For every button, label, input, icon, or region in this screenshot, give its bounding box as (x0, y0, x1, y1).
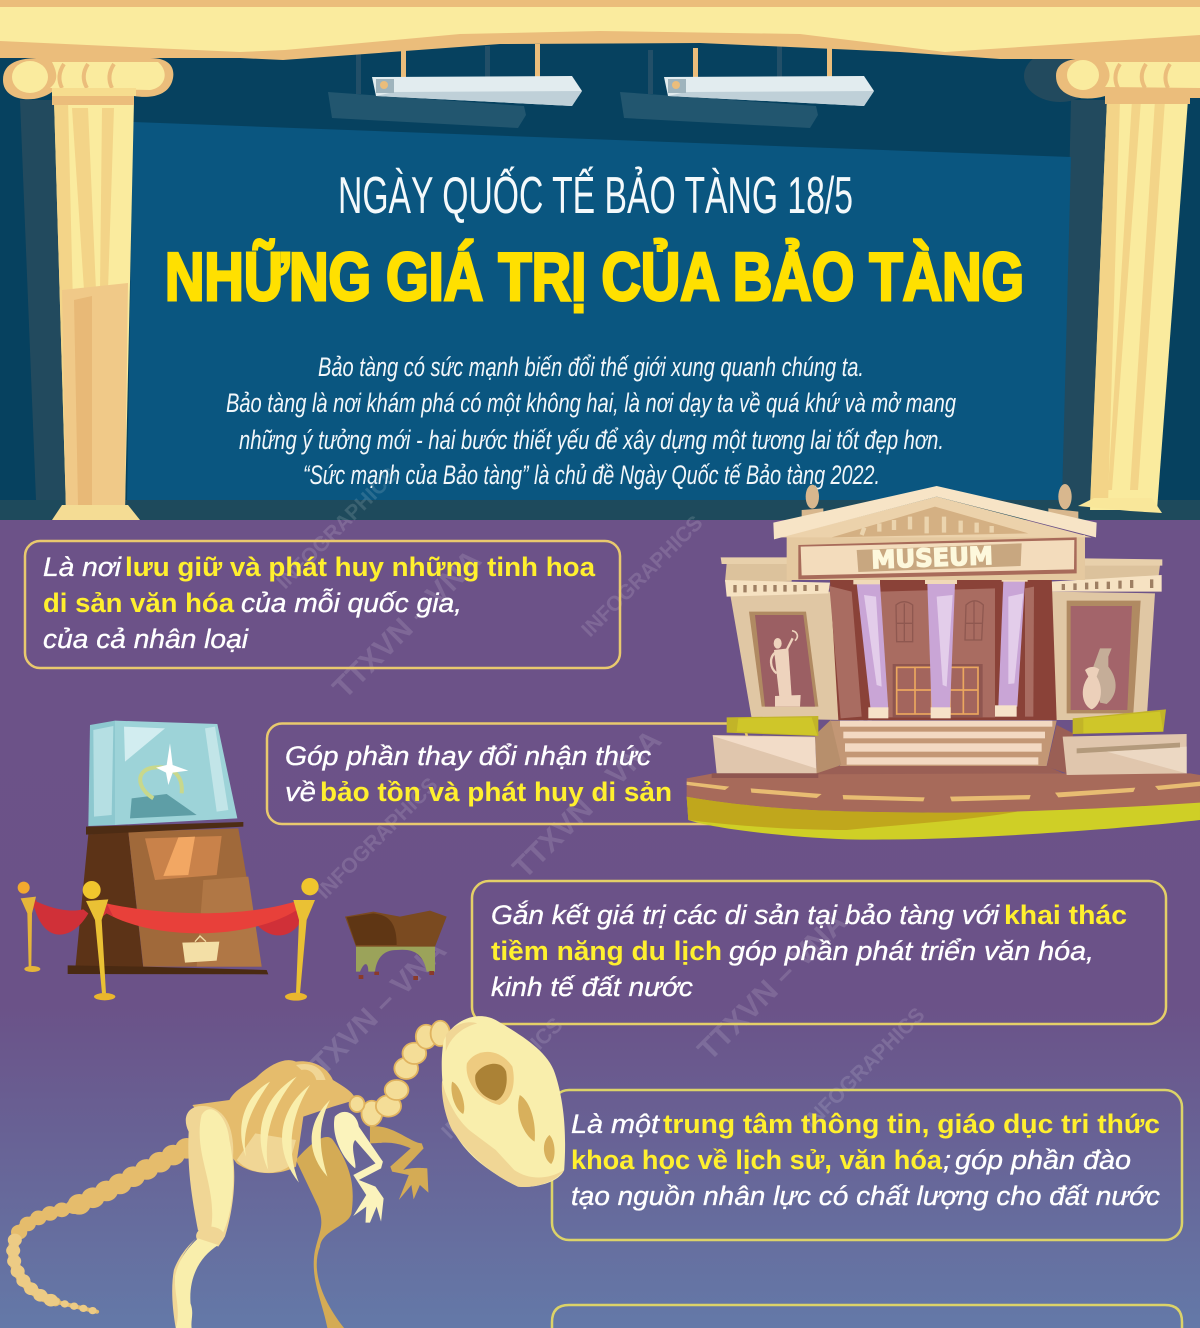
intro text block (226, 352, 956, 490)
watermarks: INFOGRAPHICS (577, 511, 707, 642)
rope posts and ropes (18, 878, 319, 1001)
callout 1: lưu giữ và phát huy những tinh hoa (125, 552, 596, 582)
callout 4: trung tâm thông tin, giáo dục tri thức (663, 1109, 1160, 1139)
callout 3: góp phần phát triển văn hóa, (729, 936, 1094, 966)
callout 5 (cropped at page bottom) (552, 1305, 1182, 1328)
watermarks: INFOGRAPHICS (272, 463, 402, 594)
callout 1 (25, 541, 620, 668)
museum sign (798, 537, 1077, 579)
far leg and arm (296, 1126, 428, 1328)
callout 1: di sản văn hóa (43, 588, 235, 618)
callout 1: của cả nhân loại (43, 624, 249, 654)
ceiling beam (0, 0, 1200, 60)
neck (350, 1021, 450, 1126)
panel: museum hall backdrop (0, 0, 1200, 520)
panel: purple content background (0, 520, 1200, 1328)
callout 4: ; (943, 1145, 951, 1175)
watermarks: INFOGRAPHICS (769, 688, 899, 819)
spine and ribcage (192, 1060, 355, 1183)
pedestal (68, 822, 268, 974)
left column (3, 58, 173, 520)
icon: museum bench (345, 911, 447, 980)
ceiling lamps (328, 44, 874, 128)
callout 4: khoa học về lịch sử, văn hóa (571, 1145, 943, 1175)
watermarks: INFOGRAPHICS (437, 1013, 567, 1144)
intro text block: những ý tưởng mới - hai bước thiết yếu để xây dựng một tương lai tốt đẹp hơn. (239, 425, 944, 455)
glass case (88, 721, 237, 826)
road and lawn (687, 766, 1200, 840)
callout 3: khai thác (1004, 900, 1127, 930)
statue and vases (771, 631, 1116, 709)
watermarks: INFOGRAPHICS (312, 773, 442, 904)
watermarks: TTXVN – VNA (327, 544, 488, 705)
title: event line: NGÀY QUỐC TẾ BẢO TÀNG 18/5 (338, 166, 853, 225)
watermarks: TTXVN – VNA (507, 724, 668, 885)
intro text block: Bảo tàng có sức mạnh biến đổi thế giới xung quanh chúng ta. (318, 352, 864, 382)
callout 3: Gắn kết giá trị các di sản tại bảo tàng với (491, 899, 1000, 930)
right column (1056, 58, 1200, 513)
tail (13, 1148, 187, 1312)
icon: display case with ropes (18, 721, 319, 1001)
portico (829, 577, 1057, 720)
wings (721, 557, 1162, 720)
intro text block: Bảo tàng là nơi khám phá có một không hai, là nơi dạy ta về quá khứ và mở mang (226, 388, 956, 418)
watermarks (272, 463, 929, 1144)
callout 2: bảo tồn và phát huy di sản (320, 777, 672, 807)
near arm (334, 1112, 384, 1223)
watermarks: TTXVN – VNA (692, 906, 853, 1067)
callout 1: Là nơi (43, 552, 122, 582)
icon: museum building (687, 484, 1200, 840)
callout 4: Là một (571, 1109, 661, 1139)
callout 4 (552, 1090, 1182, 1240)
callout 3: kinh tế đất nước (491, 972, 694, 1002)
callout 3 (472, 881, 1166, 1024)
callout 4: góp phần đào (955, 1145, 1131, 1175)
near leg (172, 1106, 234, 1328)
icon: dinosaur skeleton (13, 1016, 565, 1328)
lilac columns (853, 577, 1028, 718)
watermarks: INFOGRAPHICS (799, 1003, 929, 1134)
watermarks: TTXVN – VNA (292, 934, 453, 1095)
callout 4: tạo nguồn nhân lực có chất lượng cho đất nước (571, 1181, 1161, 1211)
callout 3: tiềm năng du lịch (491, 936, 722, 966)
museum sign: MUSEUM (871, 541, 993, 574)
callout 2: Góp phần thay đổi nhận thức (285, 741, 652, 771)
callout 2: về (285, 777, 316, 807)
callout 1: của mỗi quốc gia, (241, 587, 462, 618)
skull (442, 1016, 565, 1187)
callout 2 (267, 724, 747, 824)
intro text block: “Sức mạnh của Bảo tàng” là chủ đề Ngày Quốc tế Bảo tàng 2022. (303, 460, 880, 490)
steps and planters (712, 709, 1187, 778)
pediment (773, 484, 1097, 580)
